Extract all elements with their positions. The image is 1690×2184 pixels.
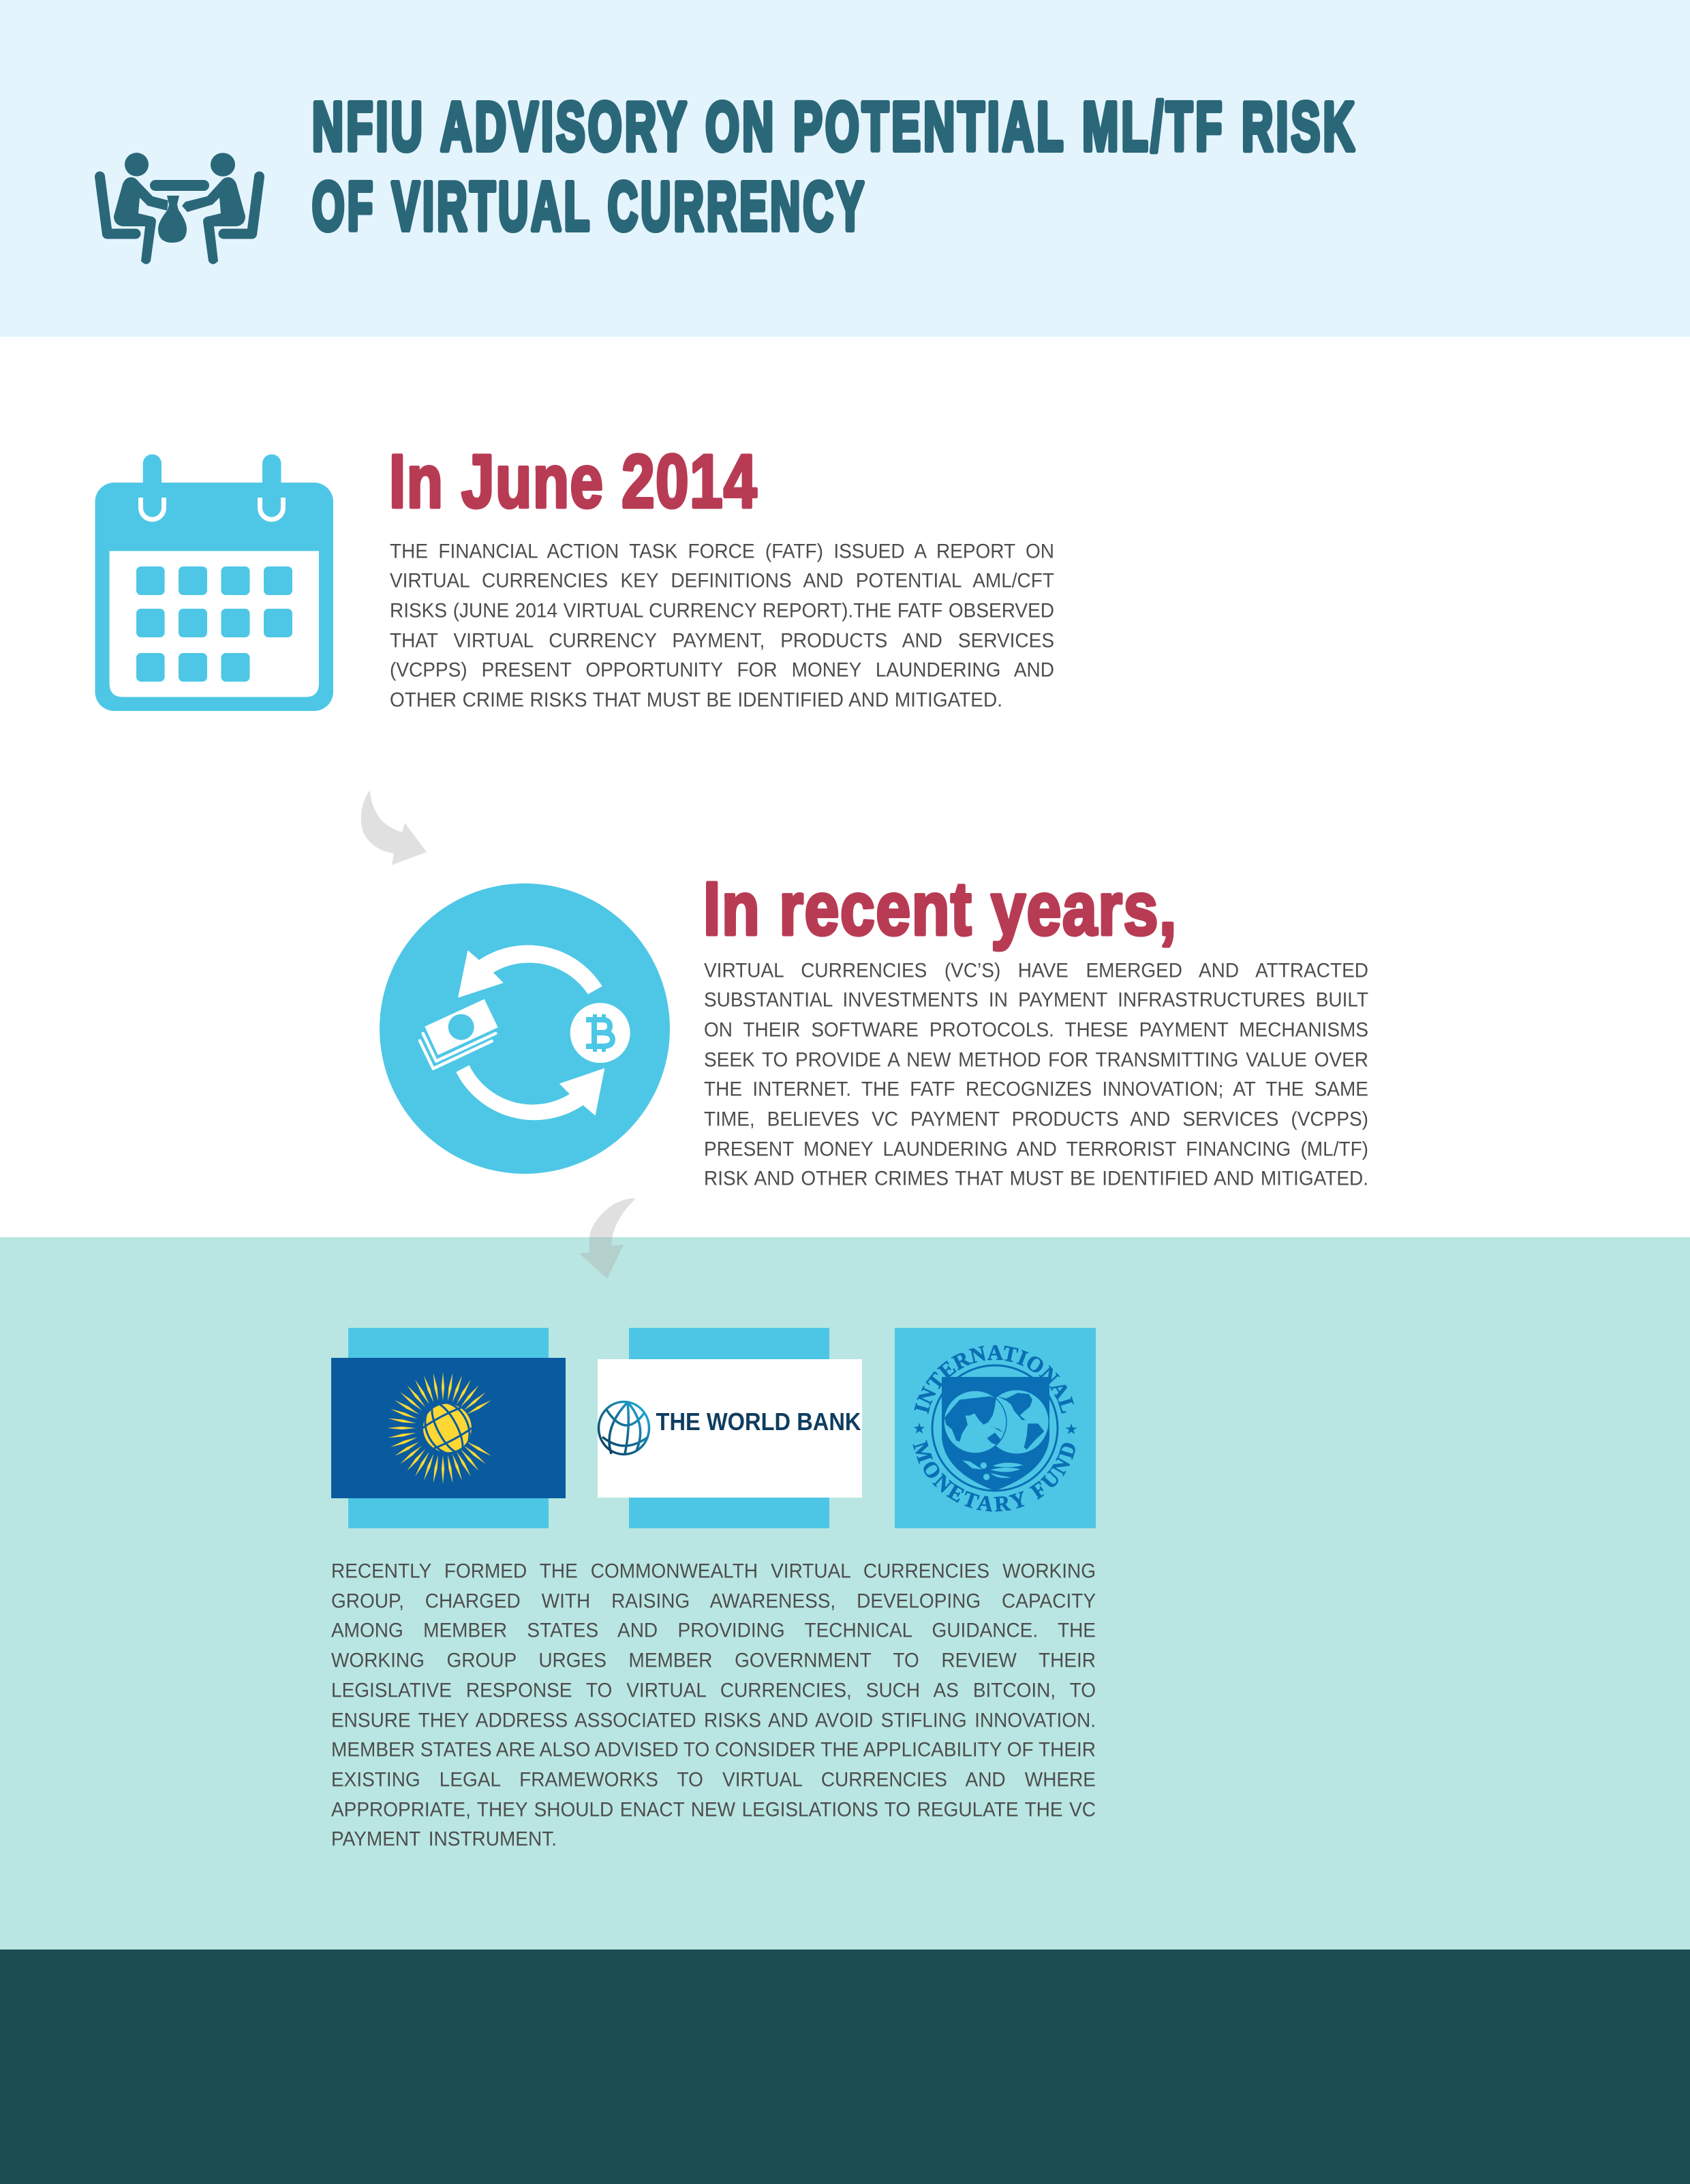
text block: recent years: VIRTUAL CURRENCIES (VC’S) HAVE EMERGED AND ATTRACTED <box>704 958 1368 982</box>
text block: June 2014: THAT VIRTUAL CURRENCY PAYMENT, PRODUCTS AND SERVICES <box>390 628 1054 652</box>
title: OF VIRTUAL CURRENCY <box>312 168 867 245</box>
text block: recent years: PRESENT MONEY LAUNDERING AND TERRORIST FINANCING (ML/TF) <box>704 1138 1368 1160</box>
text block: June 2014: RISKS (JUNE 2014 VIRTUAL CURRENCY REPORT).THE FATF OBSERVED <box>390 599 1054 622</box>
teal section band <box>0 1237 1690 1950</box>
header band <box>0 0 1690 337</box>
text block: working group: PAYMENT INSTRUMENT. <box>331 1827 557 1850</box>
text block: working group: GROUP, CHARGED WITH RAISING AWARENESS, DEVELOPING CAPACITY <box>331 1590 1096 1612</box>
text block: working group: EXISTING LEGAL FRAMEWORKS TO VIRTUAL CURRENCIES AND WHERE <box>331 1768 1096 1791</box>
text block: working group: ENSURE THEY ADDRESS ASSOCIATED RISKS AND AVOID STIFLING INNOVATION. <box>331 1708 1096 1731</box>
dark footer band <box>0 1950 1690 2184</box>
text block: recent years <box>704 958 1368 1189</box>
icon: two people exchanging money bag <box>99 153 259 264</box>
text block: working group: APPROPRIATE, THEY SHOULD ENACT NEW LEGISLATIONS TO REGULATE THE VC <box>331 1798 1096 1821</box>
logo: International Monetary Fund: ★ <box>912 1421 926 1438</box>
logo: International Monetary Fund <box>895 1328 1096 1528</box>
text block: June 2014 <box>390 539 1054 711</box>
text block: recent years: RISK AND OTHER CRIMES THAT MUST BE IDENTIFIED AND MITIGATED. <box>704 1167 1368 1189</box>
heading: In June 2014: In June 2014 <box>389 440 758 524</box>
text block: recent years: ON THEIR SOFTWARE PROTOCOLS. THESE PAYMENT MECHANISMS <box>704 1018 1368 1041</box>
text block: recent years: SUBSTANTIAL INVESTMENTS IN PAYMENT INFRASTRUCTURES BUILT <box>704 988 1368 1011</box>
text block: working group: WORKING GROUP URGES MEMBER GOVERNMENT TO REVIEW THEIR <box>331 1649 1096 1671</box>
logo: International Monetary Fund: MONETARY FUND <box>912 1440 1075 1512</box>
logo: The World Bank <box>598 1328 862 1528</box>
heading: In recent years,: In recent years, <box>703 867 1178 951</box>
text block: working group: LEGISLATIVE RESPONSE TO VIRTUAL CURRENCIES, SUCH AS BITCOIN, TO <box>331 1679 1096 1701</box>
text block: working group: MEMBER STATES ARE ALSO ADVISED TO CONSIDER THE APPLICABILITY OF THEIR <box>331 1738 1096 1761</box>
title <box>312 89 1357 245</box>
arrow: curved down right <box>361 790 427 865</box>
text block: June 2014: VIRTUAL CURRENCIES KEY DEFINITIONS AND POTENTIAL AML/CFT <box>390 569 1054 592</box>
text block: recent years: TIME, BELIEVES VC PAYMENT PRODUCTS AND SERVICES (VCPPS) <box>704 1108 1368 1130</box>
logo: Commonwealth <box>331 1328 566 1528</box>
text block: working group: RECENTLY FORMED THE COMMONWEALTH VIRTUAL CURRENCIES WORKING <box>331 1560 1096 1582</box>
text block: working group: AMONG MEMBER STATES AND PROVIDING TECHNICAL GUIDANCE. THE <box>331 1619 1096 1641</box>
text block: June 2014: (VCPPS) PRESENT OPPORTUNITY FOR MONEY LAUNDERING AND <box>390 658 1054 681</box>
text block: June 2014: THE FINANCIAL ACTION TASK FORCE (FATF) ISSUED A REPORT ON <box>390 539 1054 562</box>
logo: International Monetary Fund: INTERNATIONAL <box>914 1345 1074 1414</box>
text block: working group <box>331 1560 1096 1850</box>
icon: currency exchange circle <box>380 883 670 1174</box>
icon: calendar <box>95 454 333 711</box>
text block: June 2014: OTHER CRIME RISKS THAT MUST BE IDENTIFIED AND MITIGATED. <box>390 688 1002 711</box>
text block: recent years: SEEK TO PROVIDE A NEW METHOD FOR TRANSMITTING VALUE OVER <box>704 1048 1368 1071</box>
arrow: curved down <box>579 1198 636 1279</box>
text block: recent years: THE INTERNET. THE FATF RECOGNIZES INNOVATION; AT THE SAME <box>704 1078 1368 1100</box>
logo: The World Bank: THE WORLD BANK <box>656 1408 861 1436</box>
logo: International Monetary Fund: ★ <box>1064 1421 1078 1438</box>
